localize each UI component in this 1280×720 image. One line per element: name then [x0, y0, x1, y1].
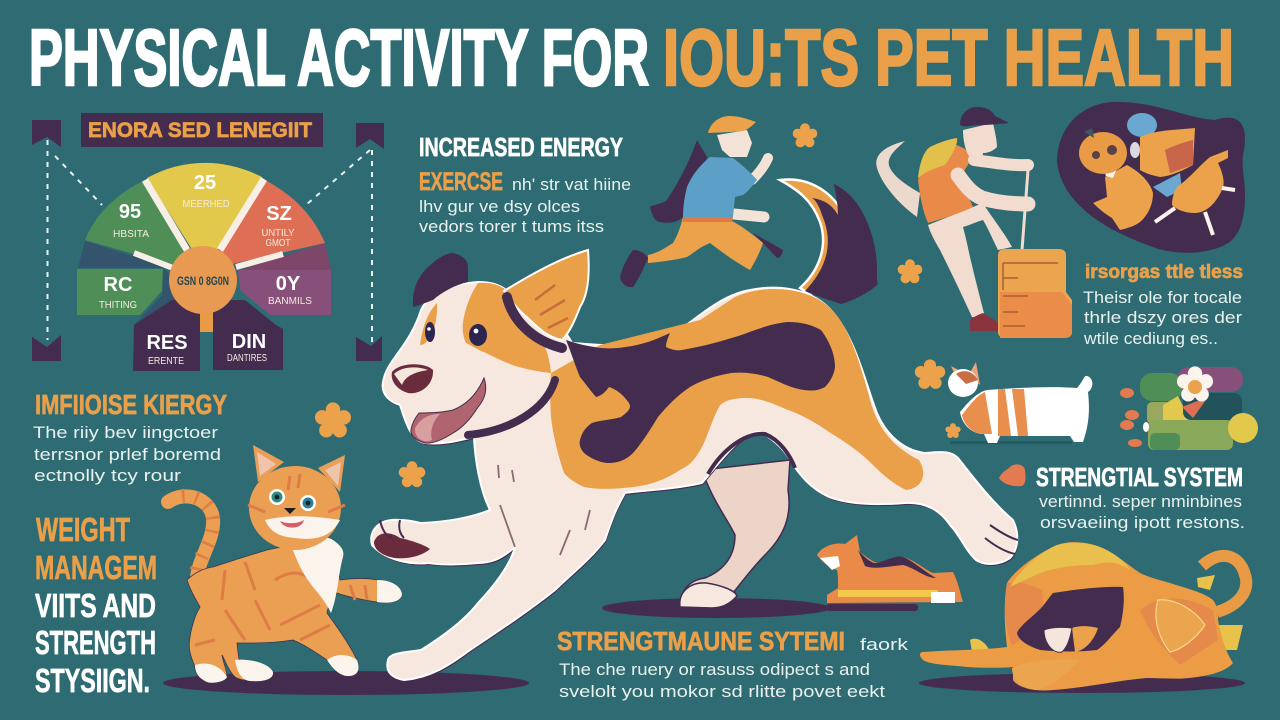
- dog head markings: [413, 253, 551, 373]
- gauge heading: ENORA SED LENEGIIT: [88, 119, 312, 142]
- gauge labels: DIN: [232, 331, 266, 353]
- text block: improve energy: The riiy bev iingctoer: [33, 423, 218, 442]
- gauge labels: HBSITA: [113, 229, 149, 240]
- cat head: [248, 445, 345, 550]
- dog far hind leg: [680, 460, 790, 607]
- gauge labels: [99, 172, 312, 367]
- small cat stripes: [962, 389, 1028, 436]
- person legs: [928, 203, 1012, 317]
- gauge labels: RC: [104, 274, 132, 296]
- dog ear: [504, 250, 589, 340]
- person cap: [960, 107, 1009, 126]
- runner hair: [650, 140, 707, 223]
- text block: immune system: STRENGTMAUNE SYTEMI: [557, 626, 845, 656]
- illustration: small orange dog lying: [817, 535, 963, 603]
- dog face: [392, 322, 487, 443]
- text block: weight management: WEIGHT: [36, 511, 130, 548]
- small dog white block: [931, 592, 955, 603]
- small cat body: [960, 376, 1092, 443]
- dog body shadow: [372, 284, 1018, 682]
- cat stripes and paws: [195, 537, 402, 683]
- dog paw pads and toe lines: [374, 465, 1018, 558]
- text block: fitness: Theisr ole for tocale: [1083, 288, 1242, 307]
- runner pants: [648, 217, 763, 270]
- pet: orange cat: [1079, 128, 1153, 230]
- sleeping dog haunch: [1156, 600, 1205, 652]
- gauge labels: DANTIRES: [227, 353, 267, 364]
- text block: strength system: orsvaeiing ipott restons.: [1040, 513, 1245, 532]
- text block: weight management: STYSIIGN.: [35, 662, 150, 699]
- person head: [963, 123, 997, 160]
- dog collar: [468, 380, 555, 435]
- orange storage box: [998, 249, 1072, 338]
- gauge labels: GMOT: [266, 238, 290, 249]
- text block: weight management: STRENGTH: [35, 624, 156, 661]
- cat tail: [168, 496, 213, 580]
- curved cream strap: [876, 141, 920, 217]
- text block: fitness: [1083, 262, 1243, 348]
- sleeping dog tail: [1202, 556, 1246, 612]
- illustration: sleeping dog: [920, 542, 1246, 691]
- corner arrows and dashed guides: [32, 120, 384, 361]
- text block: increased energy: vedors torer t tums itss: [419, 217, 604, 236]
- ground tint: [950, 441, 1072, 444]
- sleeping dog body: [920, 542, 1233, 691]
- text block: improve energy: [33, 389, 227, 485]
- figure with orange top: [1140, 128, 1235, 235]
- small dog ridge: [858, 550, 936, 578]
- ground shadows: [163, 598, 1245, 695]
- sleeping dog forepaw: [1012, 659, 1080, 690]
- text block: immune system: [557, 626, 909, 701]
- text block: strength system: [999, 462, 1245, 532]
- text block: increased energy: EXERCSE: [419, 168, 503, 196]
- runner head: [717, 130, 752, 157]
- illustration: person with box: [876, 107, 1072, 338]
- yellow tips: [970, 575, 1243, 652]
- gauge labels: 25: [194, 172, 216, 194]
- text block: improve energy: ectnolly tcy rour: [34, 466, 181, 485]
- illustration: dark vignette with pets: [1057, 102, 1245, 253]
- text block: weight management: MANAGEM: [35, 549, 157, 586]
- text block: immune system: svelolt you mokor sd rlitte povet eekt: [559, 682, 885, 701]
- dog dark patch: [566, 322, 835, 463]
- illustration: running person: [620, 116, 783, 287]
- text block: improve energy: terrsnor prlef boremd: [34, 445, 221, 464]
- dog far foot: [680, 583, 737, 608]
- gauge labels: RES: [146, 332, 188, 354]
- gauge labels: MEERHED: [182, 199, 230, 210]
- dog belly shading: [708, 434, 795, 474]
- gauge heading: [81, 113, 323, 147]
- text block: fitness: wtile cediung es..: [1083, 329, 1218, 348]
- gauge labels: 95: [119, 201, 141, 223]
- sleeping dog shaded flank: [1005, 582, 1218, 665]
- person arms and pole: [958, 160, 1028, 250]
- text block: strength system: vertinnd. seper nminbines: [1039, 492, 1242, 511]
- text block: improve energy: IMFIIOISE KIERGY: [35, 389, 227, 420]
- runner cap: [708, 116, 756, 133]
- icons: flowers: [315, 123, 961, 487]
- gauge labels: 0Y: [276, 273, 301, 295]
- gauge labels: SZ: [266, 203, 292, 225]
- text block: weight management: [35, 511, 157, 699]
- illustration: small white cat: [948, 362, 1092, 444]
- sleeping dog head: [1017, 587, 1124, 652]
- person torso: [918, 143, 973, 223]
- dog orange saddle: [550, 289, 923, 490]
- gauge labels: THITING: [99, 300, 137, 311]
- small dog body: [817, 535, 963, 603]
- dog body fill: [371, 282, 1017, 680]
- small cat head: [948, 362, 980, 397]
- illustration: main running dog: [371, 179, 1018, 682]
- small dog face: [820, 556, 840, 570]
- panel: semicircle gauge chart: [32, 113, 384, 371]
- gauge labels: BANMILS: [268, 296, 312, 307]
- text block: increased energy: INCREASED ENERGY: [419, 132, 623, 162]
- gauge segments: [77, 163, 331, 371]
- vignette blob: [1057, 102, 1245, 253]
- gauge segments: GSN 0 8G0N: [177, 274, 229, 288]
- text block: increased energy: lhv gur ve dsy olces: [419, 197, 580, 216]
- dark band below the ear: [507, 297, 562, 348]
- text block: fitness: irsorgas ttle tless: [1085, 262, 1243, 283]
- dog tail: [780, 179, 878, 304]
- small petals: [1120, 388, 1149, 447]
- icon: colourful stacked puzzle shapes: [1120, 366, 1258, 450]
- small dog yellow band: [838, 590, 938, 597]
- text block: immune system: The che ruery or rasuss odipect s and: [559, 660, 870, 679]
- gauge labels: ERENTE: [148, 356, 184, 367]
- illustration: orange tabby cat: [168, 445, 402, 683]
- title: PHYSICAL ACTIVITY FOR: [29, 13, 649, 102]
- runner arms: [734, 158, 768, 217]
- person shoe: [970, 313, 998, 331]
- runner shirt: [683, 157, 757, 217]
- text block: increased energy: [419, 132, 631, 236]
- gauge labels: UNTILY: [262, 228, 295, 239]
- text block: fitness: thrle dszy ores der: [1084, 308, 1242, 327]
- pet: blue koala: [1127, 113, 1157, 158]
- text block: weight management: VIITS AND: [35, 587, 156, 624]
- text block: immune system: faork: [860, 635, 909, 654]
- sleeping dog yellow top: [1010, 543, 1130, 587]
- runner shoes: [620, 233, 783, 287]
- cat body: [187, 540, 402, 683]
- text block: increased energy: nh' str vat hiine: [512, 175, 631, 194]
